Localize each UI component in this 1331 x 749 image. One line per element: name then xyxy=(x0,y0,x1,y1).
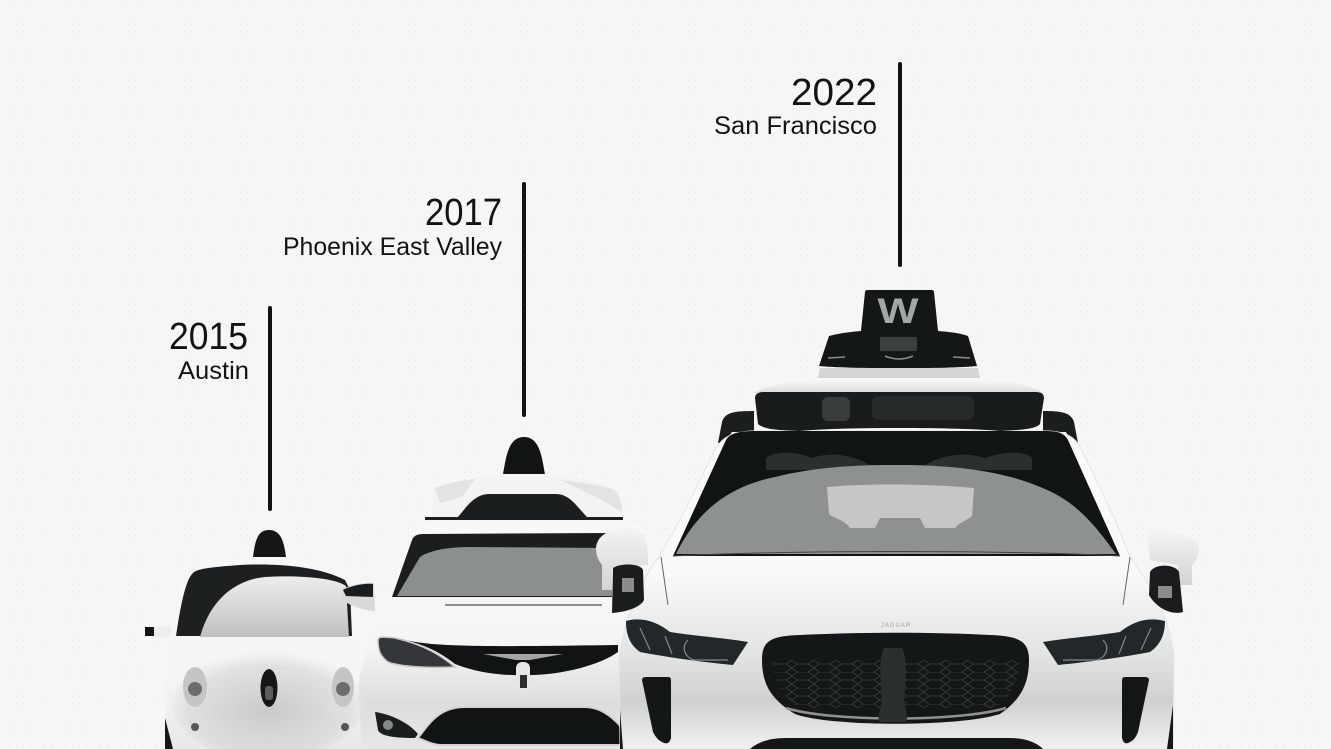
body shading xyxy=(172,651,364,749)
car: 2017 minivan xyxy=(358,437,643,749)
windshield glass xyxy=(397,547,612,596)
left headlight details xyxy=(640,628,728,660)
right mirror xyxy=(341,583,375,611)
front sensor xyxy=(260,669,278,707)
wheel shadow xyxy=(165,718,173,749)
top camera xyxy=(880,337,917,351)
car: 2015 Firefly xyxy=(145,530,377,749)
left intake xyxy=(642,677,671,743)
left headlight xyxy=(626,619,748,665)
label: 2017 Phoenix East Valley xyxy=(283,192,502,261)
label: 2015 Austin: 2015 xyxy=(169,316,248,358)
car: 2022 I-PACE xyxy=(596,290,1199,749)
car body xyxy=(165,558,377,749)
right mirror of I-PACE xyxy=(1147,531,1199,585)
sensor bar xyxy=(755,392,1044,431)
dome highlights xyxy=(828,356,970,359)
lower grille xyxy=(750,738,1043,749)
left mirror stalk xyxy=(146,627,174,637)
label: 2022 San Francisco xyxy=(714,72,877,140)
lower grille xyxy=(418,707,622,745)
label: 2022 San Francisco: 2022 xyxy=(791,72,877,114)
label: 2015 Austin: Austin xyxy=(178,357,249,385)
left mirror cap xyxy=(145,627,154,636)
left headlight xyxy=(183,667,207,707)
wheel shadows xyxy=(620,705,1173,749)
grille xyxy=(762,633,1029,724)
windshield frame xyxy=(392,533,612,597)
badge text: JAGUAR xyxy=(881,623,911,629)
glass upper tint bumps xyxy=(766,453,1032,470)
rear window reflection xyxy=(827,484,974,528)
left headlight xyxy=(378,637,455,667)
left mirror of I-PACE xyxy=(596,528,648,590)
chrome emblem xyxy=(483,654,563,660)
label: 2017 Phoenix East Valley: 2017 xyxy=(425,192,502,234)
small dots xyxy=(191,723,199,731)
right headlight details xyxy=(1063,628,1151,660)
roof sensor dome xyxy=(253,530,286,557)
roof rails xyxy=(718,411,1078,443)
label: 2017 Phoenix East Valley: Phoenix East Valley xyxy=(283,233,502,261)
label: 2015 Austin xyxy=(169,316,249,385)
front sensor xyxy=(516,662,530,692)
right headlight xyxy=(1043,619,1165,665)
roof sensor dome xyxy=(503,437,545,474)
fog light xyxy=(375,712,418,738)
cabin interior xyxy=(200,576,349,637)
windshield xyxy=(673,431,1120,556)
upper grille xyxy=(397,638,618,675)
van body xyxy=(358,520,643,749)
bar cameras xyxy=(822,397,850,421)
waymo dome xyxy=(861,290,938,331)
pod shading xyxy=(435,479,622,512)
marker line 2022 xyxy=(898,62,902,267)
windshield base line xyxy=(673,552,1120,556)
left hood seam xyxy=(661,557,1130,605)
grille chrome lip xyxy=(786,708,1006,718)
label: 2022 San Francisco: San Francisco xyxy=(714,112,877,140)
pod dark band xyxy=(425,494,623,520)
body xyxy=(619,431,1174,749)
W logo: W xyxy=(878,292,918,331)
right headlight xyxy=(332,667,354,707)
right camera xyxy=(1149,566,1183,613)
marker line 2015 xyxy=(268,306,272,511)
roof pod xyxy=(425,475,623,520)
dark window xyxy=(176,565,352,636)
sensor dome base xyxy=(819,331,977,368)
hood line xyxy=(445,604,602,606)
white roof pod xyxy=(754,378,1043,393)
right intake xyxy=(1122,677,1149,743)
white band xyxy=(818,368,980,378)
glass reflection xyxy=(676,465,1116,554)
grille sensor xyxy=(878,648,907,722)
marker line 2017 xyxy=(522,182,526,417)
left camera xyxy=(612,564,644,613)
honeycomb mesh xyxy=(772,660,1020,708)
